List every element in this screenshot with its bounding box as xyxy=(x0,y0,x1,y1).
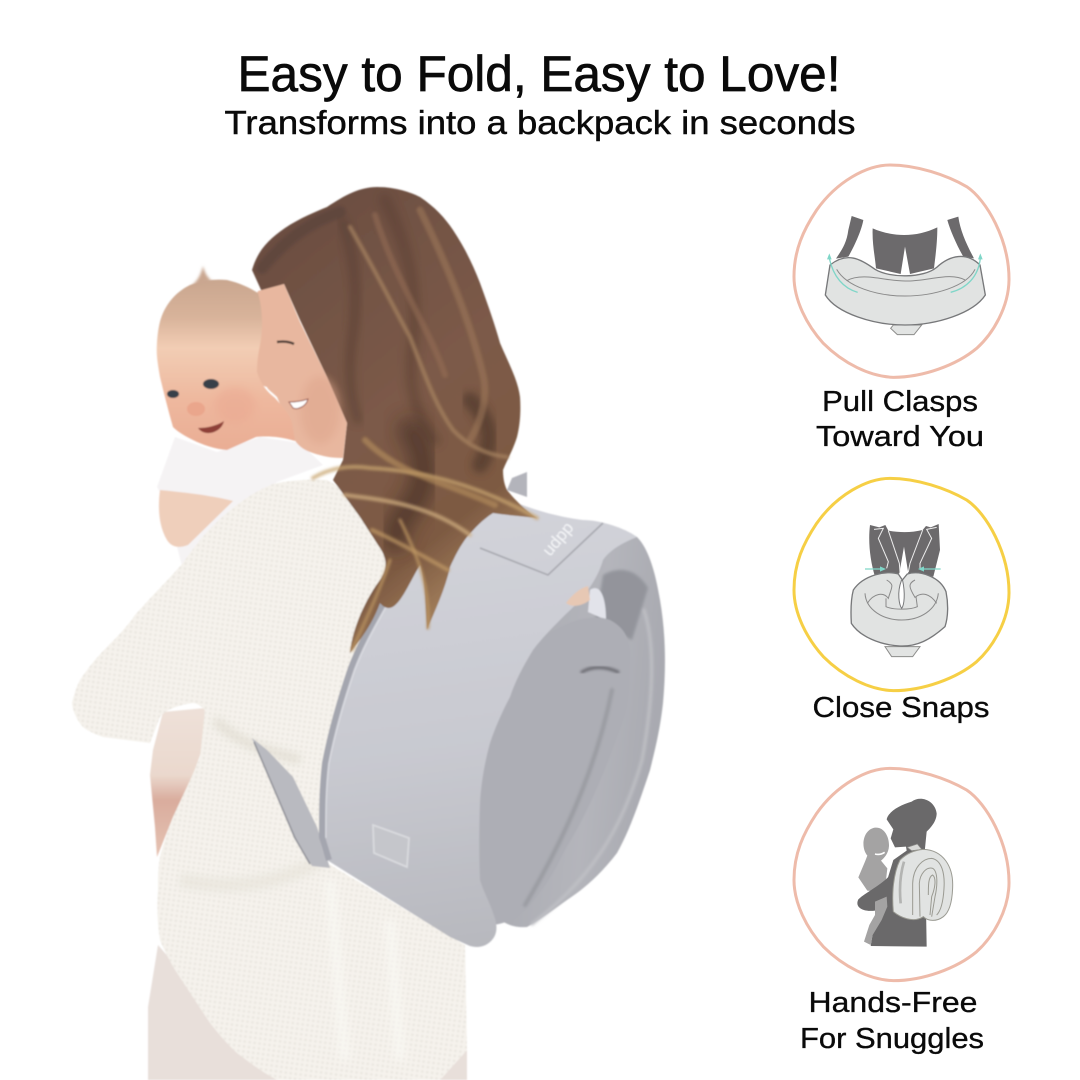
baby nose xyxy=(187,402,205,416)
sweater folds xyxy=(180,720,400,1060)
middle roll xyxy=(470,617,630,925)
label xyxy=(800,987,984,1055)
blob outline yellow xyxy=(794,478,1009,691)
brand tag: udpp xyxy=(539,518,577,560)
woman face xyxy=(255,284,347,458)
label: Toward You xyxy=(816,421,984,453)
panel binding xyxy=(322,552,413,860)
binding highlight xyxy=(326,554,417,838)
baby eyes xyxy=(167,379,219,398)
sweater xyxy=(72,480,467,1080)
panel: step 3 hands-free xyxy=(794,768,1009,1055)
baby head xyxy=(157,280,295,450)
baby hair tuft xyxy=(190,266,212,287)
label xyxy=(816,386,984,453)
baby leg xyxy=(150,708,205,857)
baby onesie under arm xyxy=(157,437,323,570)
panel: step 2 close snaps xyxy=(794,478,1009,724)
top handle xyxy=(507,472,527,497)
panel pocket xyxy=(373,825,409,867)
label: Hands-Free xyxy=(808,987,978,1019)
subtitle: Transforms into a backpack in seconds xyxy=(224,104,856,141)
main panel xyxy=(320,503,637,947)
icon: mother silhouette with baby and backpack xyxy=(857,799,953,947)
icon: closed snaps xyxy=(851,524,948,657)
label: Close Snaps xyxy=(812,692,990,724)
woman smile xyxy=(289,399,308,409)
baby arm xyxy=(159,490,233,547)
pants xyxy=(148,945,467,1080)
hand xyxy=(566,586,590,606)
baby cheek xyxy=(215,387,255,423)
backpack strap xyxy=(252,738,330,868)
panel: step 1 pull clasps xyxy=(794,165,1009,453)
hair mass xyxy=(252,187,537,653)
sweater waffle texture xyxy=(72,480,467,1080)
woman eye xyxy=(277,342,294,344)
label: For Snuggles xyxy=(800,1023,984,1055)
title: Easy to Fold, Easy to Love! xyxy=(238,46,840,102)
blob outline peach xyxy=(794,165,1009,377)
strap edge xyxy=(254,742,310,864)
icon: straps and tray xyxy=(825,216,985,335)
label: Pull Clasps xyxy=(822,386,978,418)
inner fabric xyxy=(588,588,606,620)
baby mouth xyxy=(198,421,224,433)
panel seams xyxy=(480,523,603,575)
dark gap behind inner roll xyxy=(595,570,648,640)
hair strands xyxy=(262,200,537,650)
face shading xyxy=(300,376,340,444)
photo: mother carrying baby with folded pillow backpack xyxy=(72,187,665,1080)
fold creases xyxy=(525,610,652,924)
outer roll xyxy=(470,535,665,927)
blob outline peach xyxy=(794,768,1009,981)
